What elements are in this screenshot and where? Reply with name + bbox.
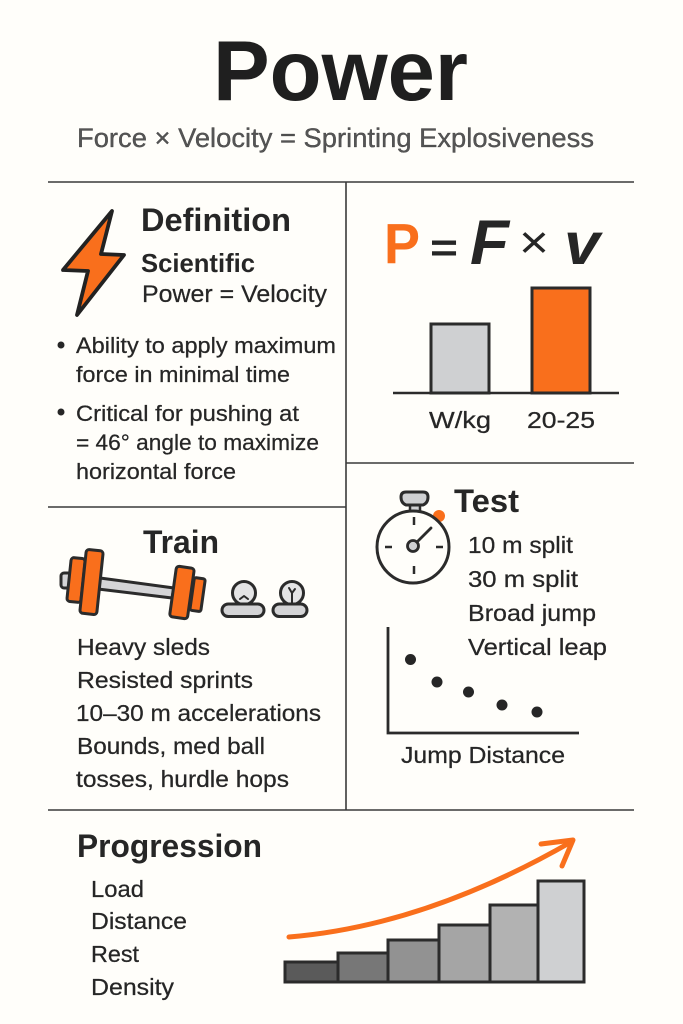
icon: barbell [61, 549, 205, 619]
bullet list: Critical for pushing at [76, 401, 300, 426]
bar chart: 20-25 [527, 407, 595, 433]
test list [468, 532, 607, 660]
test list: Vertical leap [468, 634, 607, 660]
stepped bar chart [285, 881, 584, 982]
title: Power [213, 24, 468, 119]
definition heading: Definition [141, 202, 291, 238]
progression list: Load [91, 876, 144, 902]
bar chart [393, 288, 619, 433]
test list: Broad jump [468, 600, 596, 626]
definition subheading: Scientific [141, 248, 255, 278]
progression list: Density [91, 974, 174, 1000]
subtitle: Force × Velocity = Sprinting Explosiveness [77, 123, 594, 153]
formula: P [384, 212, 420, 276]
panel: formula [384, 208, 619, 433]
bullet list [58, 333, 336, 484]
test heading: Test [454, 483, 519, 519]
scatter plot [388, 627, 579, 768]
panel: progression [77, 828, 584, 1000]
train list: Heavy sleds [77, 634, 210, 660]
train list: Bounds, med ball [77, 733, 265, 759]
progression heading: Progression [77, 828, 262, 864]
bar chart: W/kg [429, 407, 491, 433]
bullet list: Ability to apply maximum [76, 333, 336, 358]
progression list: Distance [91, 908, 187, 934]
test list: 30 m split [468, 566, 578, 592]
train list: Resisted sprints [77, 667, 253, 693]
panel: definition [58, 202, 336, 484]
train list: 10–30 m accelerations [76, 700, 321, 726]
formula: × [519, 216, 549, 268]
formula: F [470, 208, 511, 278]
test list: 10 m split [468, 532, 573, 558]
icon: stopwatch [377, 492, 449, 583]
train heading: Train [143, 524, 219, 560]
bullet list: horizontal force [76, 459, 236, 484]
icon: lightning bolt [63, 211, 124, 315]
train list: tosses, hurdle hops [76, 766, 289, 792]
panel: train [61, 524, 321, 792]
formula: = [430, 226, 458, 270]
bullet list: = 46° angle to maximize [76, 430, 319, 455]
arrow: upward trend [289, 840, 573, 937]
formula: v [564, 211, 603, 277]
scatter plot: Jump Distance [401, 742, 565, 768]
progression list [91, 876, 187, 1000]
train list [76, 634, 321, 792]
progression list: Rest [91, 941, 139, 967]
definition formula: Power = Velocity [142, 281, 328, 308]
bullet list: force in minimal time [76, 362, 290, 387]
formula [384, 208, 603, 278]
panel: test [377, 483, 607, 768]
icon: weights [222, 582, 307, 616]
